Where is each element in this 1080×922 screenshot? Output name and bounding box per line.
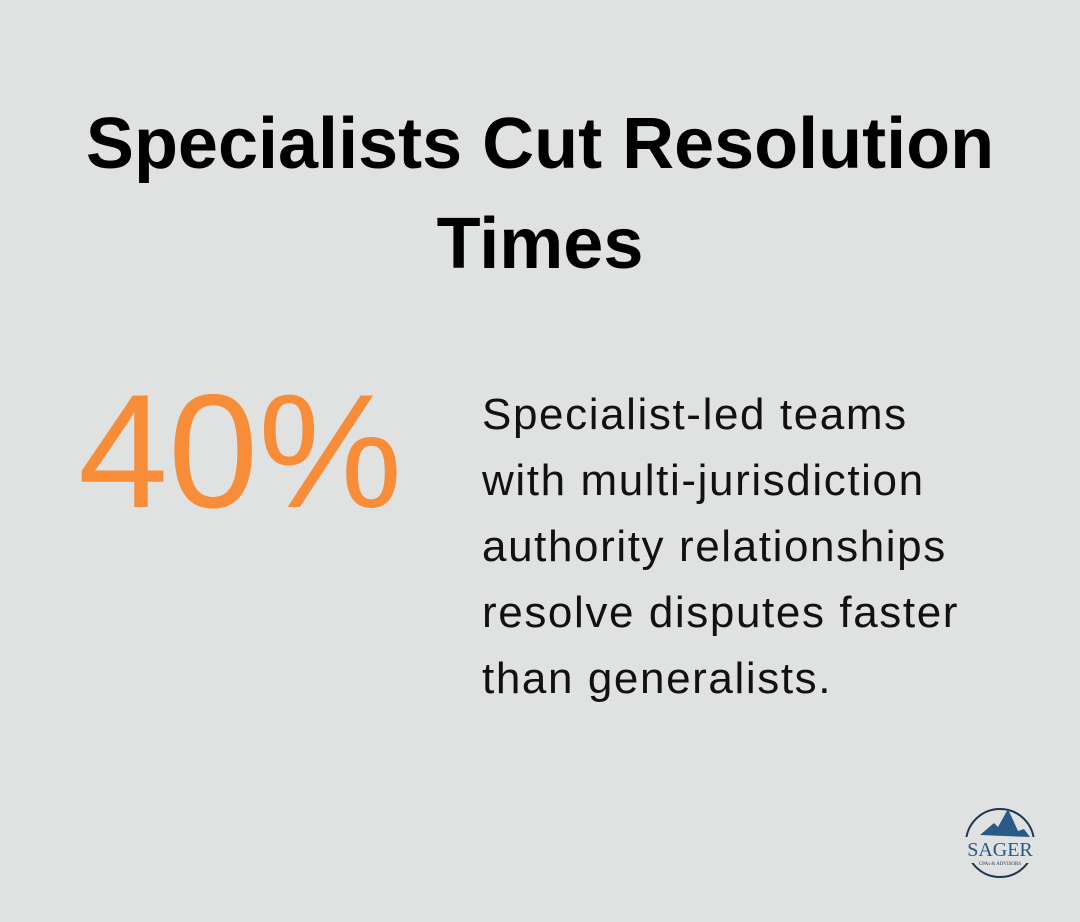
description [482, 390, 959, 703]
description: authority relationships [482, 522, 947, 571]
big stat: 40% [78, 361, 402, 542]
description: with multi-jurisdiction [482, 456, 925, 505]
description: than generalists. [482, 654, 832, 703]
logo [966, 808, 1034, 878]
description: resolve disputes faster [482, 588, 959, 637]
title: Times [437, 204, 643, 284]
title [86, 104, 994, 284]
logo: CPAs & ADVISORS [979, 862, 1021, 867]
title: Specialists Cut Resolution [86, 104, 994, 184]
logo: SAGER [967, 839, 1033, 861]
description: Specialist-led teams [482, 390, 908, 439]
